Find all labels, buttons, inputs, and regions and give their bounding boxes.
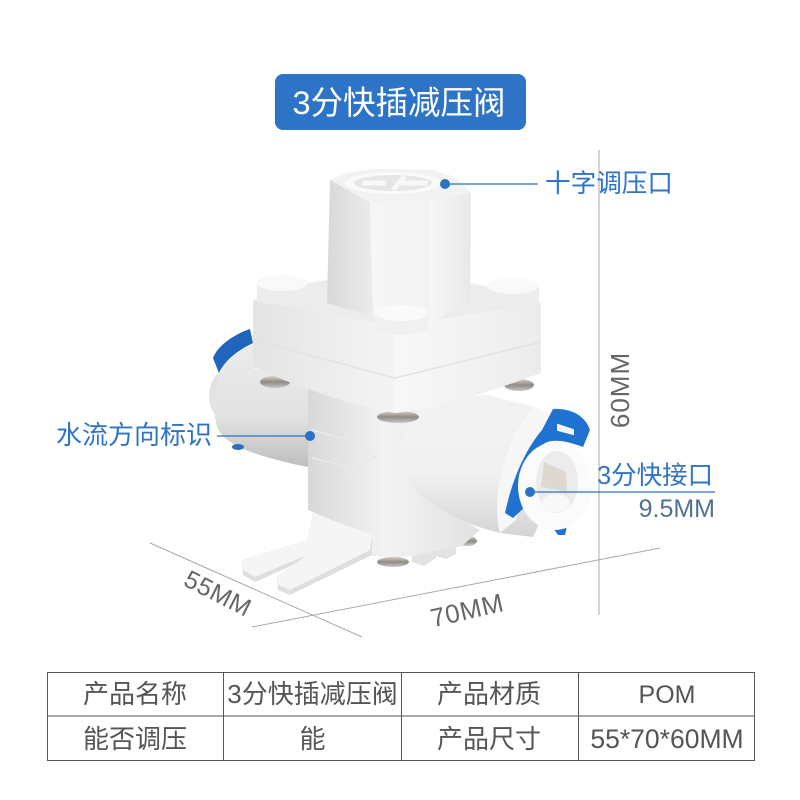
specification table: 3分快插减压阀 (227, 679, 398, 709)
dimension lines (150, 150, 660, 637)
front lower screw (377, 557, 409, 567)
dimension label: height: 60MM (605, 352, 635, 428)
right port opening (518, 442, 592, 530)
mounting foot (242, 513, 372, 595)
central body (308, 385, 480, 558)
specification table: 产品材质 (437, 679, 541, 709)
flow direction arrow (312, 430, 375, 474)
cap housing (253, 280, 541, 413)
callout: water flow direction mark: 水流方向标识 (56, 420, 212, 450)
callout: water flow direction mark (56, 420, 315, 450)
callout: quick connector port (525, 462, 715, 523)
callout: cross pressure adjustment port (440, 169, 673, 198)
product illustration: pressure reducing valve (209, 169, 592, 595)
title badge (275, 74, 526, 130)
right blue clip (505, 409, 590, 518)
callout: cross pressure adjustment port: 十字调压口 (545, 169, 673, 198)
specification table: 产品尺寸 (437, 724, 541, 754)
specification table: 产品名称 (83, 679, 187, 709)
cap corner pegs (257, 275, 539, 335)
left port with blue clip (209, 329, 320, 468)
title badge: 3分快插减压阀 (292, 85, 506, 121)
callout: quick connector port: 9.5MM (639, 495, 715, 523)
specification table: 55*70*60MM (590, 724, 744, 754)
rear lower screw (457, 536, 477, 546)
dimension label: depth: 55MM (179, 565, 256, 623)
specification table (47, 672, 755, 761)
lower feet nubs (412, 541, 456, 566)
right port tube (398, 395, 560, 537)
specification table: POM (639, 681, 695, 709)
rear right screw (504, 379, 534, 391)
front centre screw (377, 411, 419, 423)
specification table: 能否调压 (83, 724, 187, 754)
dimension label: width: 70MM (427, 587, 507, 633)
callout: quick connector port: 3分快接口 (597, 462, 713, 490)
hexagonal adjusting column (327, 169, 471, 322)
right port collar (497, 407, 550, 533)
specification table: 能 (299, 724, 326, 754)
